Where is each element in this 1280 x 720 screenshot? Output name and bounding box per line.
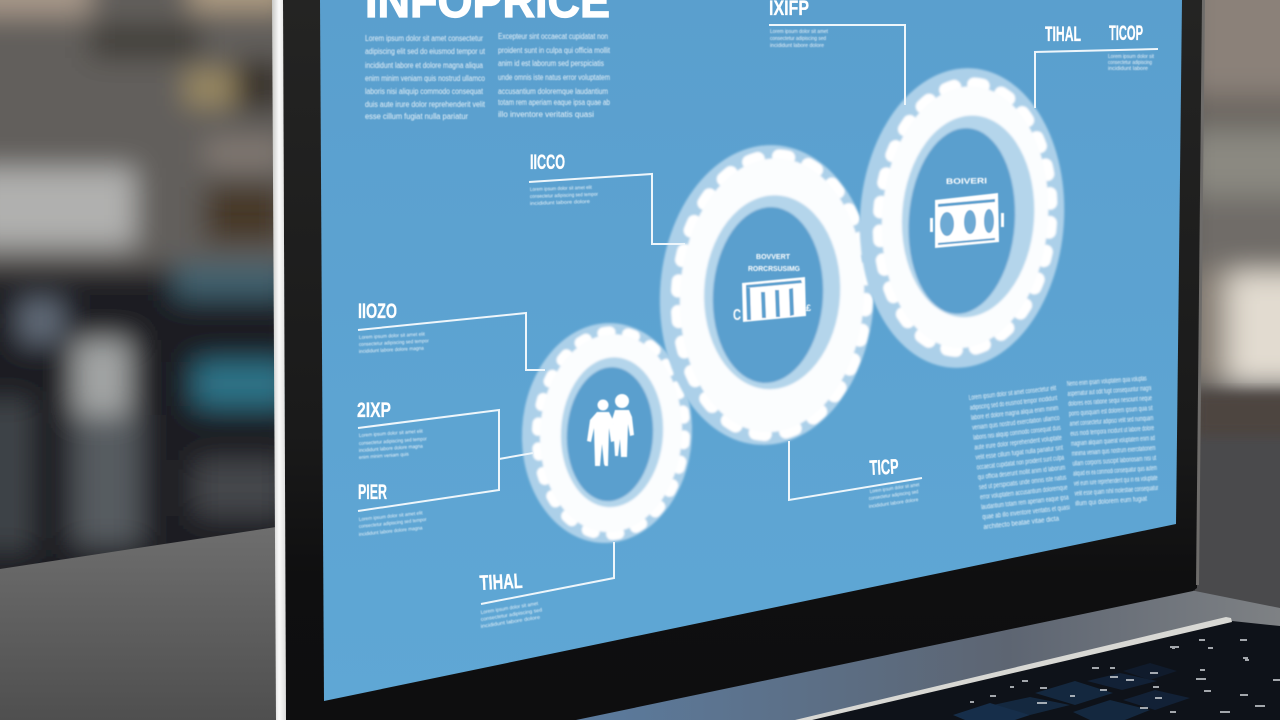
body text column bottom right: aliquid ex ea commodi consequatur quis autem [1073, 465, 1157, 478]
keyboard [808, 621, 1280, 720]
body text column bottom right: aspernatur aut odit fugit consequuntur magni [1067, 385, 1152, 398]
callout: label 5 IICCO: consectetur adipiscing sed tempor [530, 192, 598, 200]
callout: label 7 top right: Lorem ipsum dolor sit [1108, 54, 1155, 60]
body text column bottom left [968, 385, 1072, 531]
callout: label 1 IIOZO: IIOZO [358, 300, 397, 323]
gear three content: BOIVERI [946, 176, 987, 186]
intro text column one: enim minim veniam quis nostrud ullamco [365, 74, 485, 83]
callout: label 4 TIHAL bottom: incididunt labore dolore [480, 615, 541, 630]
body text column bottom left: architecto beatae vitae dicta [983, 516, 1060, 531]
display left silver edge [272, 0, 286, 720]
callout: label 3 PIER: Lorem ipsum dolor sit amet elit [359, 510, 423, 523]
callout: label 2 2IXP: enim minim veniam quis [359, 451, 409, 461]
callout: label 2 2IXP: 2IXP [357, 399, 391, 422]
callout: label 5 IICCO [529, 151, 685, 244]
callout: label 4 TIHAL bottom [479, 542, 614, 630]
callout: label 6 top centre: incididunt labore dolore [770, 43, 824, 49]
callout: label 6 top centre [769, 0, 905, 105]
callout: label 3 PIER [358, 481, 427, 538]
gear one [516, 319, 698, 547]
body text column bottom left: sed ut perspiciatis unde omnis iste natus [979, 474, 1067, 491]
intro text column two: accusantium doloremque laudantium [498, 87, 608, 96]
body text column bottom right: porro quisquam est dolorem ipsum quia sit [1069, 405, 1153, 418]
display right edge [1196, 0, 1205, 585]
body text column bottom right: ullam corporis suscipit laboriosam nisi ut [1072, 455, 1157, 468]
callout: label 1 IIOZO [358, 300, 545, 370]
callout: label 7 top right [1035, 22, 1158, 108]
body text column bottom left: adipiscing sed do eiusmod tempor incididunt [970, 395, 1058, 412]
gear three content [930, 176, 1004, 248]
laptop base [560, 590, 1280, 720]
callout: label 5 IICCO: Lorem ipsum dolor sit amet elit [530, 185, 593, 193]
callout: label 7 top right: TIHAL [1045, 23, 1081, 46]
icon: two people [587, 394, 634, 466]
gear three [850, 61, 1074, 375]
callout: label 8 bottom right [789, 441, 922, 510]
intro text column two: totam rem aperiam eaque ipsa quae ab [498, 98, 610, 107]
intro text column two: Excepteur sint occaecat cupidatat non [498, 32, 608, 41]
gear two [652, 140, 882, 450]
intro text column one: duis aute irure dolor reprehenderit velit [365, 100, 486, 109]
callout: label 3 PIER: PIER [358, 481, 387, 504]
body text column bottom right: velit esse quam nihil molestiae consequatur [1074, 485, 1159, 498]
intro text column one: Lorem ipsum dolor sit amet consectetur [365, 34, 483, 43]
callout: label 6 top centre: consectetur adipiscing sed [770, 36, 826, 42]
callout: label 2 2IXP: consectetur adipiscing sed tempor [359, 436, 427, 447]
callout: label 5 IICCO: IICCO [530, 151, 565, 174]
body text column bottom right: illum qui dolorem eum fugiat [1075, 496, 1147, 508]
gear two content: BOVVERT [756, 254, 791, 261]
body text column bottom left: qui officia deserunt mollit anim id laborum [977, 465, 1066, 481]
body text column bottom left: labore et dolore magna aliqua enim minim [971, 405, 1059, 422]
callout: label 2 2IXP: incididunt labore dolore magna [359, 444, 423, 454]
callout: label 6 top centre: Lorem ipsum dolor sit amet [770, 29, 829, 35]
body text column bottom left: error voluptatem accusantium doloremque [980, 484, 1068, 501]
body text column bottom left: laudantium totam rem aperiam eaque ipsa [981, 494, 1069, 511]
body text column bottom right: eius modi tempora incidunt ut labore dolore [1070, 425, 1154, 438]
body text column bottom left: Lorem ipsum dolor sit amet consectetur elit [968, 385, 1057, 402]
callout: label 8 bottom right: TICP [869, 456, 899, 480]
body text column bottom left: occaecat cupidatat non proident sunt culpa [976, 455, 1065, 472]
intro text column two [498, 32, 611, 119]
intro text column one [365, 34, 486, 121]
body text column bottom left: aute irure dolor reprehenderit voluptate [974, 435, 1062, 452]
intro text column two: anim id est laborum sed perspiciatis [498, 59, 604, 68]
callout: label 4 TIHAL bottom: Lorem ipsum dolor sit amet [480, 601, 539, 616]
callout: label 5 IICCO: incididunt labore dolore [530, 199, 590, 207]
body text column bottom right: amet consectetur adipisci velit sed numquam [1069, 415, 1154, 428]
blurred background right [1185, 0, 1280, 620]
callout: label 7 top right: consectetur adipiscing [1108, 60, 1152, 66]
intro text column two: illo inventore veritatis quasi [498, 110, 594, 119]
body text column bottom right: vel eum iure reprehenderit qui in ea voluptate [1074, 475, 1158, 488]
intro text column two: unde omnis iste natus error voluptatem [498, 73, 610, 82]
gear two content: £ [806, 303, 811, 313]
callout: label 1 IIOZO: incididunt labore dolore magna [359, 346, 424, 355]
body text column bottom left: laboris nisi aliquip commodo consequat duis [973, 425, 1062, 442]
blurred background left [0, 0, 300, 720]
callout: label 7 top right: TICOP [1109, 22, 1143, 45]
callout: label 8 bottom right: Lorem ipsum dolor sit amet [869, 482, 920, 495]
gear two content: RORCRSUSIMG [748, 266, 801, 273]
gear two content: C [733, 307, 741, 324]
display bezel [283, 0, 1204, 720]
callout: label 4 TIHAL bottom: TIHAL [479, 570, 523, 595]
callout: label 3 PIER: consectetur adipiscing sed tempor [359, 517, 427, 530]
keyboard front silver strip [795, 617, 1232, 720]
callout: label 8 bottom right: consectetur adipiscing sed [868, 489, 919, 502]
gear two content [733, 254, 811, 324]
callout: label 4 TIHAL bottom: consectetur adipiscing sed [480, 607, 543, 623]
body text column bottom right: Nemo enim ipsam voluptatem quia voluptas [1067, 375, 1147, 388]
callout: label 8 bottom right: incididunt labore dolore [868, 497, 919, 510]
screen panel [320, 0, 1182, 701]
intro text column one: esse cillum fugiat nulla pariatur [365, 112, 468, 121]
intro text column one: incididunt labore et dolore magna aliqua [365, 61, 483, 70]
body text column bottom right: magnam aliquam quaerat voluptatem enim ad [1071, 435, 1155, 448]
intro text column one: laboris nisi aliquip commodo consequat [365, 87, 484, 96]
callout: label 2 2IXP: Lorem ipsum dolor sit amet elit [359, 429, 424, 439]
intro text column one: adipiscing elit sed do eiusmod tempor ut [365, 47, 486, 56]
callout: label 1 IIOZO: Lorem ipsum dolor sit amet elit [359, 332, 426, 341]
body text column bottom right: dolores eos ratione sequi nesciunt neque [1068, 395, 1152, 408]
body text column bottom right: minima veniam quis nostrum exercitationem [1072, 445, 1156, 458]
body text column bottom left: veniam quis nostrud exercitation ullamco [972, 415, 1060, 432]
callout: label 2 2IXP [357, 399, 533, 511]
callout: label 7 top right: incididunt labore [1108, 66, 1148, 72]
body text column bottom left: velit esse cillum fugiat nulla pariatur sint [975, 445, 1063, 462]
callout: label 1 IIOZO: consectetur adipiscing sed tempor [359, 338, 429, 348]
body text column bottom left: quae ab illo inventore veritatis et quasi [982, 504, 1071, 521]
intro text column two: proident sunt in culpa qui officia mollit [498, 46, 611, 55]
body text column bottom right [1067, 375, 1160, 508]
callout: label 3 PIER: incididunt labore dolore magna [359, 525, 423, 538]
